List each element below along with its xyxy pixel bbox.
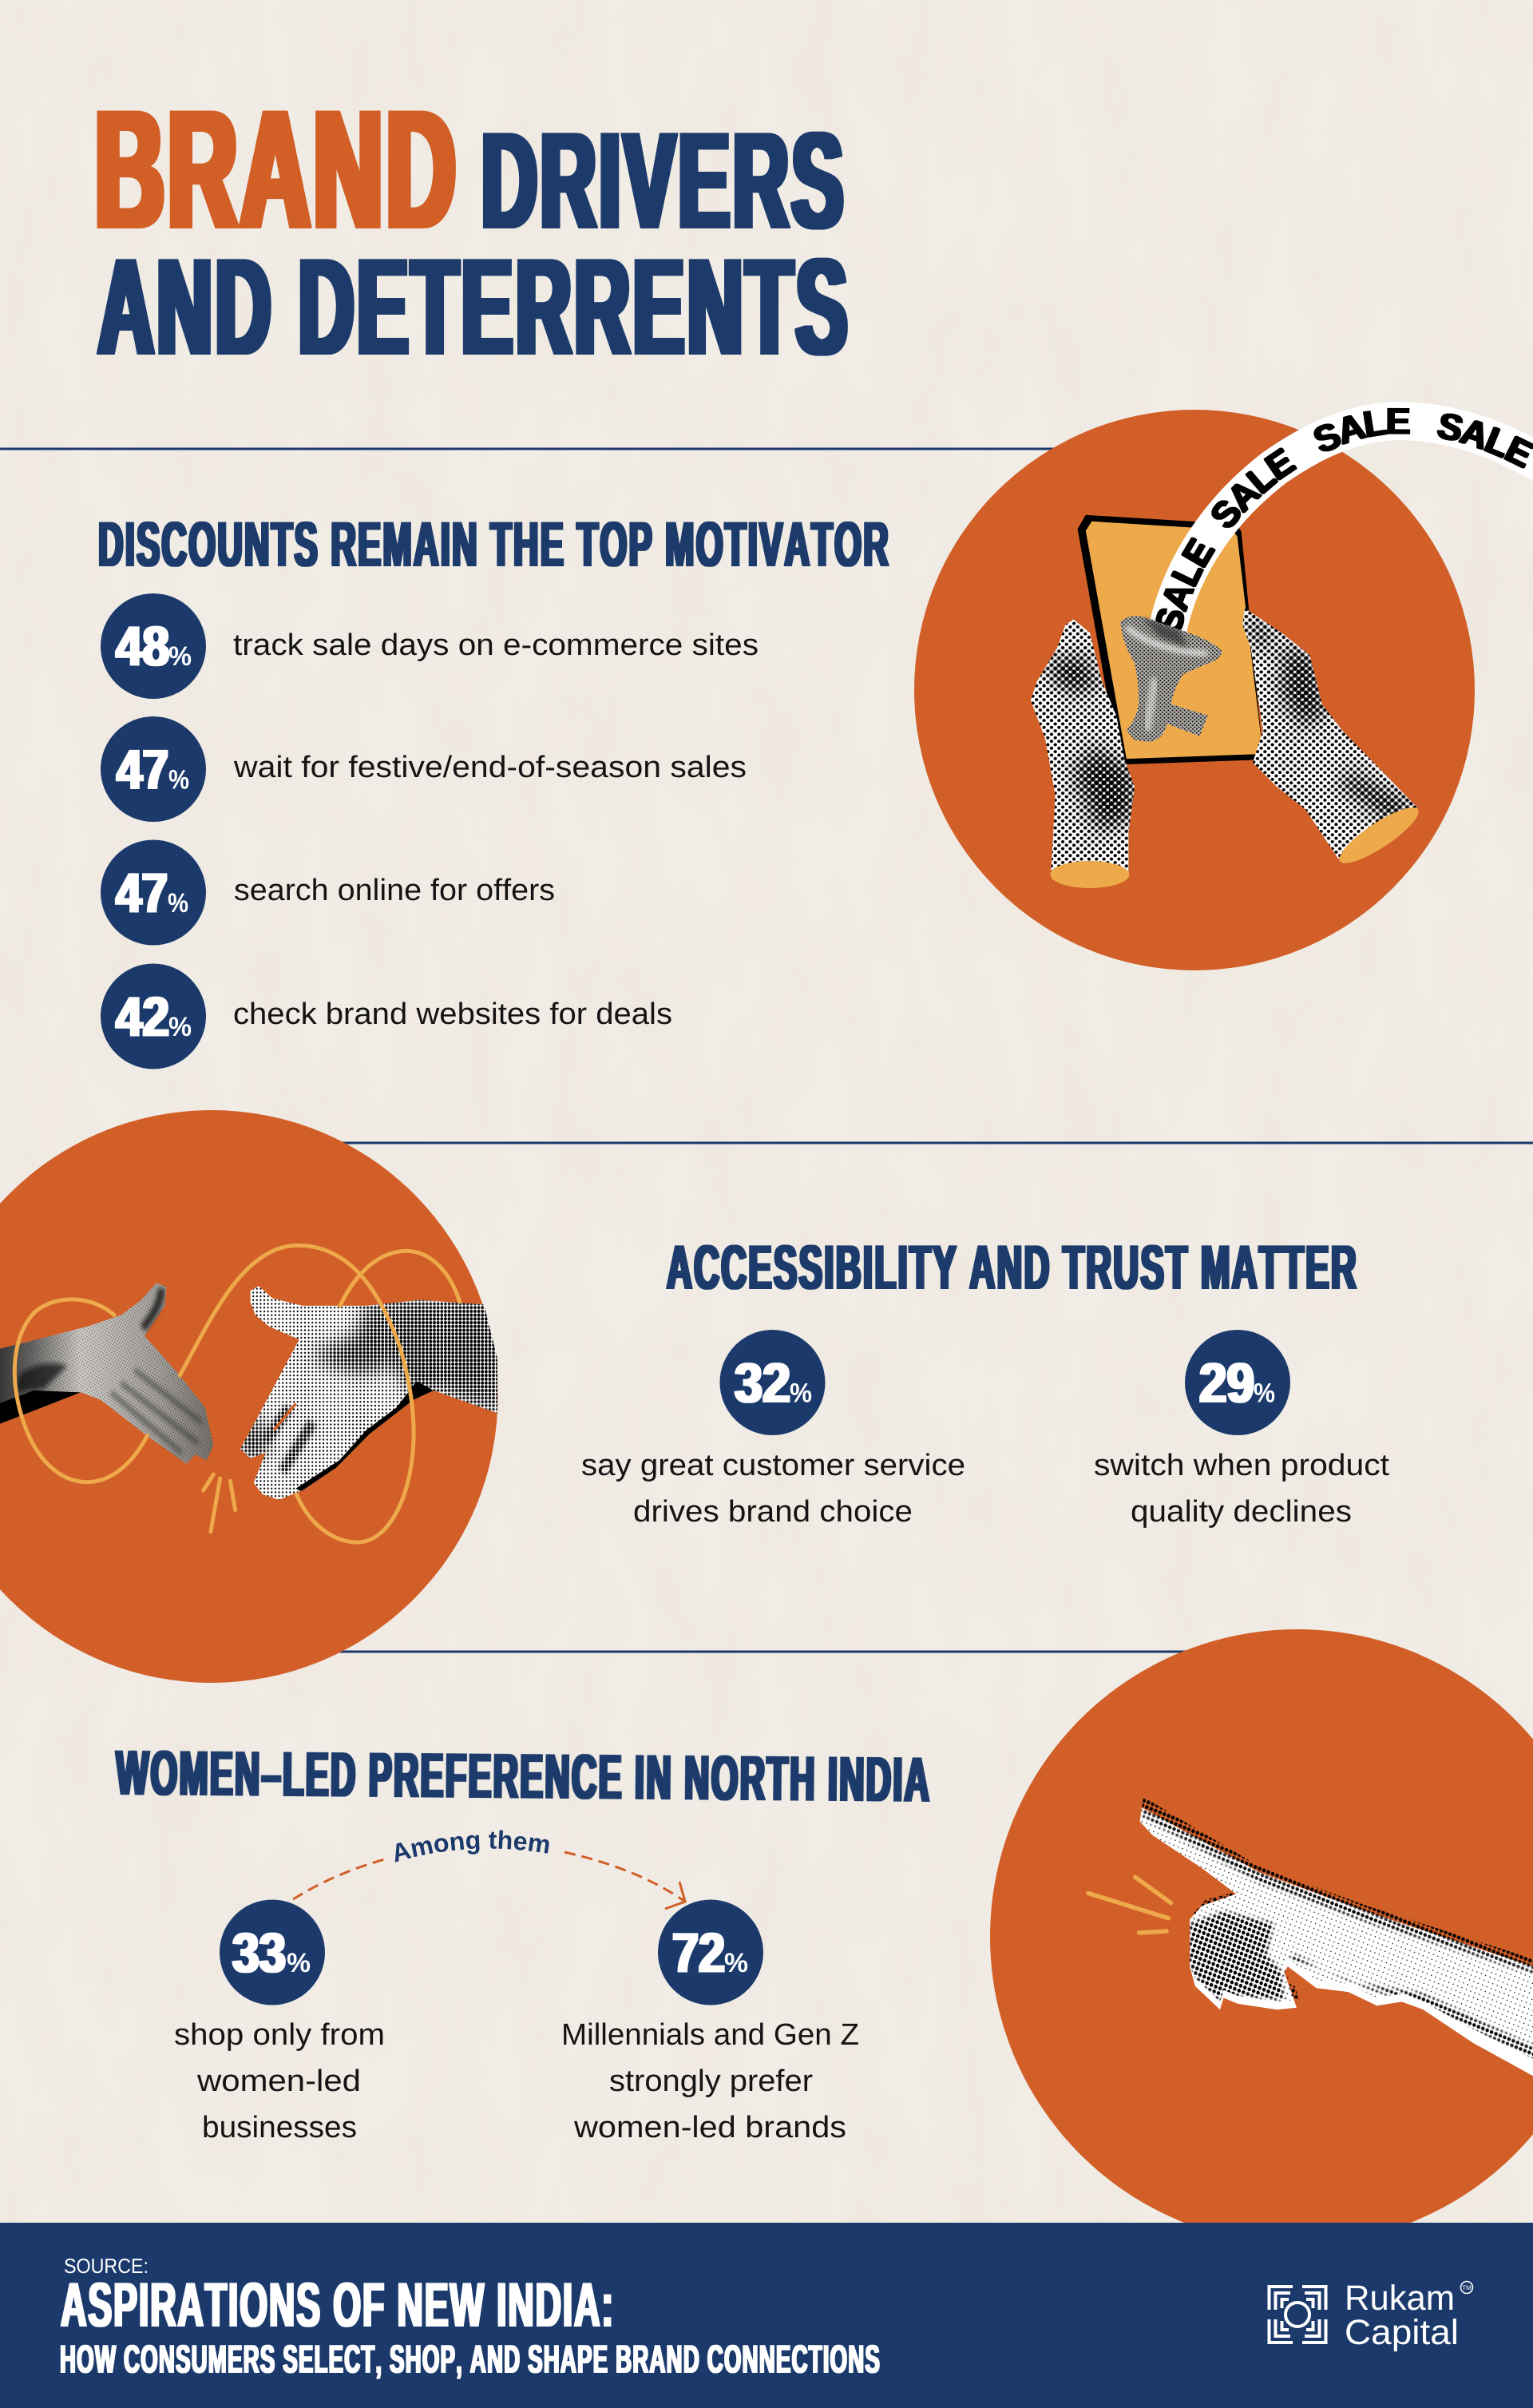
heading: discounts: DISCOUNTS REMAIN THE TOP MOTIVATOR [98, 508, 890, 580]
stat: 42 percent: check brand websites for deals [233, 998, 672, 1031]
source subtitle: HOW CONSUMERS SELECT, SHOP, AND SHAPE BRAND CONNECTIONS [60, 2339, 881, 2382]
stat: 33 percent [174, 1899, 385, 2144]
spark ticks [204, 1474, 236, 1532]
section divider lines [0, 447, 1533, 1653]
stat: 47 percent festive [101, 716, 747, 822]
title line: AND DETERRENTS: AND DETERRENTS [98, 231, 850, 383]
icon: megaphone [1120, 616, 1222, 742]
icon: pointing hand [1138, 1802, 1533, 2082]
sale ribbon: SALE [1313, 407, 1410, 452]
stat: 33 percent: 33 [232, 1922, 286, 1984]
stat: 32 percent: say great customer service [581, 1449, 965, 1482]
phone [1078, 515, 1263, 764]
left sleeve opening [1050, 861, 1129, 888]
halftone shadow [1142, 1797, 1533, 2000]
stat: 72 percent: women-led brands [573, 2111, 846, 2144]
stat: 47 percent search: 47 [116, 862, 168, 924]
stat: 32 percent: drives brand choice [633, 1495, 913, 1529]
logo: Rukam Capital: Capital [1345, 2313, 1459, 2352]
logo: Rukam Capital [1270, 2279, 1472, 2352]
stat: 47 percent search: search online for offers [234, 874, 555, 907]
right sleeve opening [1333, 799, 1425, 871]
stat: 29 percent: quality declines [1131, 1495, 1352, 1529]
stat: 33 percent: women-led [196, 2065, 361, 2098]
orange circle [990, 1629, 1533, 2244]
stat: 48 percent [101, 593, 759, 699]
stat: 33 percent: % [287, 1948, 311, 1978]
source title: ASPIRATIONS OF NEW INDIA: [61, 2270, 615, 2340]
title word: BRAND: BRAND [95, 75, 459, 264]
stat: 29 percent: % [1254, 1379, 1275, 1409]
icon: left hand [0, 1283, 213, 1464]
footer [0, 2223, 1533, 2408]
logo: Rukam Capital: Rukam [1345, 2279, 1455, 2318]
sale ribbon: SALE [1155, 537, 1216, 630]
infinity loop [14, 1245, 460, 1542]
orange circle [914, 410, 1475, 970]
panel: accessibility and trust [581, 1232, 1389, 1529]
stat: 29 percent: switch when product [1094, 1449, 1389, 1482]
stat: 72 percent: % [724, 1948, 748, 1978]
source label: SOURCE: [64, 2254, 149, 2278]
illustration: hands holding phone with sale ribbon [914, 402, 1533, 970]
stat: 32 percent [581, 1330, 965, 1529]
stat: 48 percent: track sale days on e-commerce sites [233, 629, 759, 662]
stat: 72 percent: strongly prefer [609, 2065, 813, 2098]
icon: right hand [236, 1283, 504, 1509]
title [95, 75, 850, 383]
icon: right hand [1242, 609, 1418, 859]
stat: 42 percent: % [168, 1012, 192, 1042]
logo: Rukam Capital: TM [1462, 2284, 1472, 2291]
sale ribbon: SALE [1211, 447, 1297, 528]
panel: women-led preference [115, 1737, 932, 2144]
stat: 72 percent: 72 [672, 1922, 725, 1984]
stat: 42 percent [101, 963, 672, 1069]
stat: 29 percent [1094, 1330, 1389, 1529]
orange circle [0, 1110, 498, 1683]
stat: 47 percent festive: 47 [117, 738, 168, 800]
arrow: dashed connector [293, 1852, 685, 1909]
stat: 72 percent [561, 1899, 859, 2144]
stat: 42 percent: 42 [116, 986, 169, 1048]
title word: DRIVERS: DRIVERS [481, 105, 846, 257]
illustration: pointing hand [990, 1629, 1533, 2244]
stat: 47 percent festive: % [168, 765, 189, 795]
stat: 33 percent: businesses [202, 2111, 357, 2144]
sale ribbon [1150, 402, 1533, 633]
stat: 32 percent: % [790, 1379, 812, 1409]
illustration: handshake [0, 1110, 504, 1683]
stat: 32 percent: 32 [735, 1351, 790, 1414]
spark ticks [1088, 1877, 1171, 1933]
stat: 47 percent festive: wait for festive/end-of-season sales [233, 751, 747, 784]
stat: 33 percent: shop only from [174, 2018, 385, 2052]
stat: 48 percent: 48 [116, 615, 169, 677]
stat: 29 percent: 29 [1199, 1351, 1254, 1414]
stat: 47 percent search: % [168, 888, 188, 918]
stat: 47 percent search [101, 840, 555, 946]
panel: discounts [98, 508, 890, 1069]
halftone hands and megaphone [1024, 602, 1425, 888]
stat: 72 percent: Millennials and Gen Z [561, 2018, 859, 2052]
icon: left hand [1031, 620, 1135, 872]
stat: 48 percent: % [168, 641, 192, 672]
label: among them: Among them [394, 1831, 549, 1863]
